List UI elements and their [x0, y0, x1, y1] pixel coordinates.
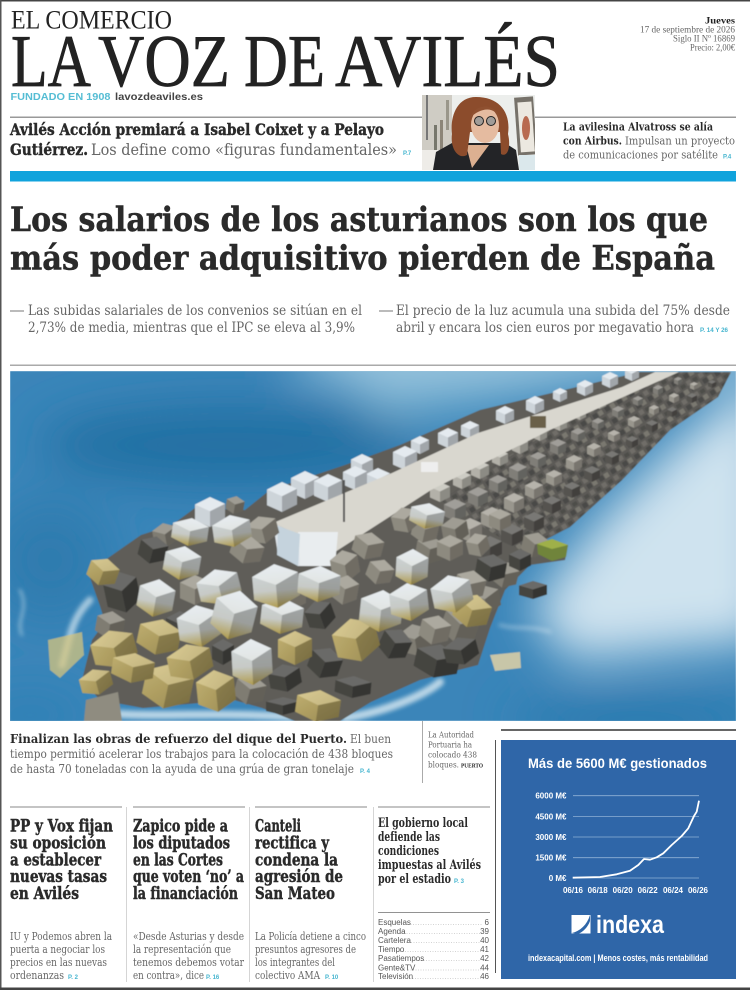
story column 3: rectifica y — [255, 834, 329, 852]
masthead — [10, 4, 560, 103]
section index: Gente&TV — [378, 964, 416, 972]
teaser: Alvatross: La avilesina Alvatross se alía — [563, 120, 713, 134]
near blocks — [48, 495, 568, 725]
ad footer: indexacapital.com | Menos costes, más rentabilidad — [528, 953, 708, 963]
line chart: 06/24 — [663, 886, 684, 895]
line chart — [535, 792, 709, 895]
main headline — [10, 200, 715, 278]
story column 2: en las Cortes — [133, 850, 223, 870]
photo caption: Finalizan las obras de refuerzo del dique del Puerto. — [10, 731, 347, 746]
story column 2: que voten ‘no’ a — [133, 867, 244, 886]
line chart: 06/26 — [688, 886, 709, 895]
secondary caption: PUERTO — [461, 764, 483, 770]
teaser: Alvatross: P.4 — [723, 154, 732, 160]
advertisement: Indexa — [501, 740, 736, 979]
rock mass — [82, 372, 655, 721]
story column 3: los integrantes del — [255, 955, 335, 969]
story column 4: defiende las — [378, 830, 440, 845]
section index: Pasatiempos — [378, 954, 424, 963]
line chart: 06/18 — [588, 886, 608, 895]
story column 2: la representación que — [133, 942, 231, 956]
ad title: Más de 5600 M€ gestionados — [528, 755, 707, 771]
photo caption: de hasta 70 toneladas con la ayuda de una grúa de gran tonelaje — [10, 761, 354, 776]
newspaper title: AVILÉS — [335, 21, 560, 103]
main photo: breakwater with concrete blocks — [10, 371, 736, 721]
line chart: 1500 M€ — [535, 854, 567, 862]
section index: 6 — [485, 918, 490, 927]
section index: 40 — [480, 936, 490, 945]
story column 3: P. 10 — [325, 975, 339, 981]
secondary caption: bloques. — [428, 760, 459, 770]
subheadline: electricity — [379, 303, 730, 336]
story column 3: presuntos agresores de — [255, 942, 356, 956]
indexa wordmark: indexa — [596, 911, 665, 939]
subheadline: salaries — [10, 303, 362, 336]
pale cubes along the left of the road — [195, 367, 639, 527]
story column 2: «Desde Asturias y desde — [133, 929, 244, 943]
issue date block: Jueves — [705, 16, 735, 26]
teaser: Avilés Acción: P.7 — [403, 151, 412, 157]
story column 1 — [10, 806, 122, 982]
teaser: Alvatross: con Airbus. — [563, 134, 622, 148]
foam around the blocks — [20, 590, 550, 718]
blue divider bar — [10, 171, 736, 182]
secondary caption: Portuaria ha — [428, 740, 472, 750]
story column 4: El gobierno local — [378, 816, 468, 831]
story column 1: PP y Vox fijan — [10, 816, 113, 836]
story column 1: puerta a negociar los — [10, 942, 105, 956]
line chart: 06/20 — [613, 886, 633, 895]
story column 2: en contra», dice — [133, 968, 204, 982]
subheadline: salaries: 2,73% de media, mientras que el IPC se eleva al 3,9% — [28, 320, 355, 336]
story column 3: La Policía detiene a cinco — [255, 929, 366, 943]
story column 2: P. 16 — [206, 975, 220, 981]
newspaper title: LA — [11, 21, 91, 103]
story column 1: nuevas tasas — [10, 867, 107, 886]
issue date block: 17 de septiembre de 2026 — [640, 26, 735, 36]
section index: 41 — [480, 945, 490, 954]
website: lavozdeaviles.es — [115, 91, 203, 103]
story column 2 — [133, 806, 245, 982]
story column 1: precios en las nuevas — [10, 955, 107, 969]
parent brand: El Comercio: EL COMERCIO — [11, 4, 172, 34]
section index: Tiempo — [378, 945, 405, 954]
teaser: Avilés Acción — [9, 120, 412, 159]
photo caption: tiempo permitió acelerar los trabajos para la colocación de 438 bloques — [10, 746, 393, 761]
teaser: Alvatross: Impulsan un proyecto — [625, 134, 735, 148]
story column 3: San Mateo — [255, 884, 335, 903]
story column 1: su oposición — [10, 834, 106, 852]
far cubes, right of the road — [430, 373, 716, 560]
section index: 44 — [480, 964, 490, 972]
issue date block — [640, 16, 735, 54]
issue date block: Siglo II Nº 16869 — [673, 34, 735, 44]
section index: 42 — [480, 954, 490, 963]
story column 3: colectivo AMA — [255, 968, 321, 982]
story column 2: Zapico pide a — [133, 816, 228, 836]
subheadline: electricity: abril y encara los cien euros por megavatio hora — [396, 320, 694, 336]
story column 3: Canteli — [255, 816, 301, 836]
photo: Isabel Coixet — [422, 95, 537, 170]
story column 4: por el estadio — [378, 872, 451, 887]
section index: 46 — [480, 972, 490, 981]
story column 2: los diputados — [133, 834, 230, 852]
photo caption: El buen — [350, 731, 391, 746]
story column 3: condena la — [255, 850, 338, 870]
story column 3: agresión de — [255, 867, 343, 886]
teaser: Alvatross: de comunicaciones por satélite — [563, 148, 718, 162]
photo caption: P. 4 — [360, 769, 371, 775]
story column 3 — [255, 806, 367, 982]
newspaper title — [11, 21, 560, 103]
section index: Esquelas — [378, 918, 411, 927]
section index: Cartelera — [378, 936, 411, 945]
dike road — [273, 372, 679, 552]
teaser: Alvatross — [563, 120, 735, 162]
issue date block: Precio: 2,00€ — [690, 44, 735, 54]
story column 4: impuestas al Avilés — [378, 858, 481, 873]
story column 4: condiciones — [378, 844, 439, 859]
subheadline: electricity: P. 14 Y 26 — [700, 328, 729, 334]
line chart: 0 M€ — [549, 874, 567, 883]
secondary caption — [428, 730, 483, 770]
story column 2: la financiación — [133, 884, 238, 903]
secondary caption: colocado 438 — [428, 750, 477, 760]
section index: Televisión — [378, 972, 413, 981]
story column 1: IU y Podemos abren la — [10, 929, 112, 943]
founding line: FUNDADO EN 1908 — [10, 91, 111, 103]
story column 1: en Avilés — [10, 884, 79, 903]
story column 1: P. 2 — [68, 975, 79, 981]
teaser: Avilés Acción: Avilés Acción premiará a Isabel Coixet y a Pelayo — [9, 120, 384, 139]
section index — [378, 912, 490, 981]
teaser: Avilés Acción: Gutiérrez. — [10, 140, 88, 159]
story column 2: tenemos debemos votar — [133, 955, 244, 969]
subheadline: salaries: Las subidas salariales de los convenios se sitúan en el — [28, 303, 362, 319]
line chart: 06/22 — [638, 886, 658, 895]
line chart: 06/16 — [563, 886, 584, 895]
section index: Agenda — [378, 927, 406, 936]
newspaper title: DE — [244, 21, 325, 103]
teaser: Avilés Acción: Los define como «figuras fundamentales» — [91, 140, 397, 159]
line chart: 3000 M€ — [535, 833, 567, 842]
line chart: 4500 M€ — [535, 812, 567, 822]
photo caption — [10, 731, 393, 776]
newspaper title: VOZ — [98, 21, 230, 103]
story column 4: P. 3 — [454, 879, 465, 885]
indexa logo icon — [572, 915, 590, 934]
section index: 39 — [480, 927, 490, 936]
line chart: 6000 M€ — [535, 792, 567, 800]
story column 4 — [378, 806, 490, 887]
secondary caption: La Autoridad — [428, 730, 474, 740]
story column 1: a establecer — [10, 850, 101, 870]
story column 1: ordenanzas — [10, 968, 64, 982]
